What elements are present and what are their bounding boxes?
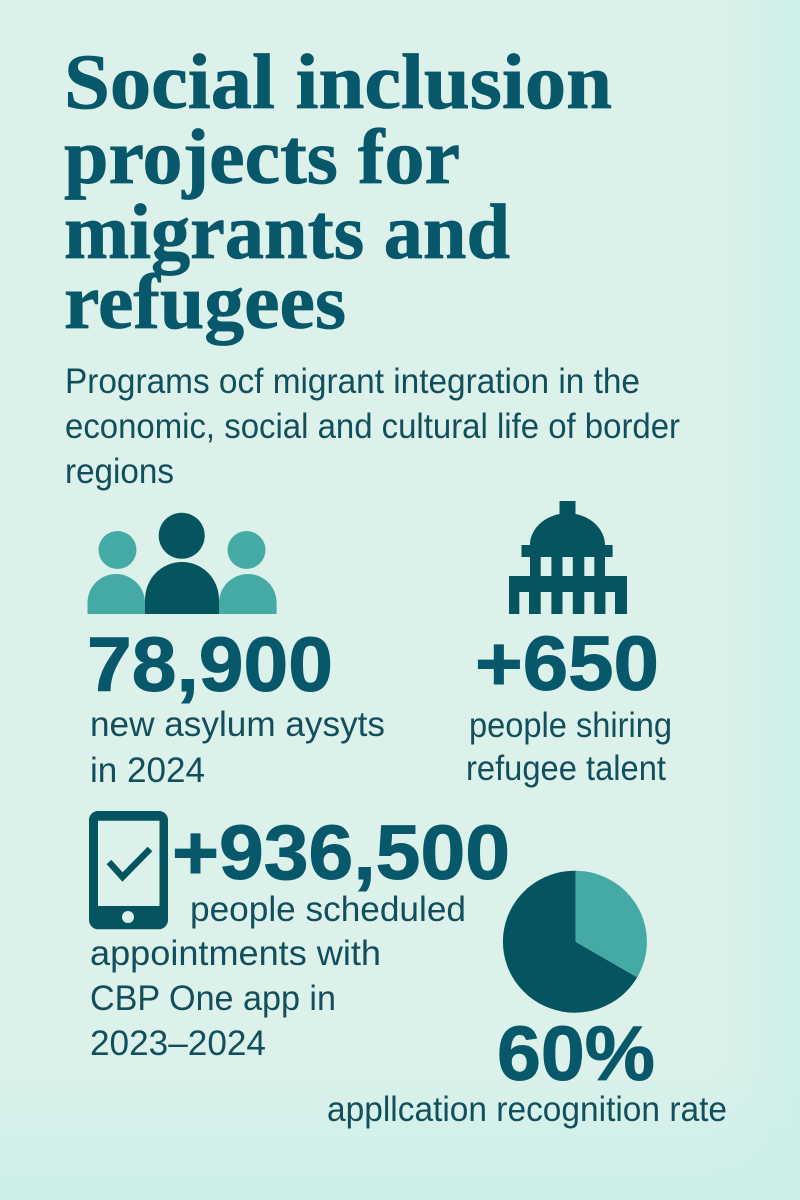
stat: +650: +650 (475, 621, 659, 707)
subtitle: regions (65, 452, 174, 491)
label: people shiring refugee talent (466, 706, 672, 788)
label: people shiring refugee talent: people shiring (469, 706, 672, 745)
stat: +936,500: +936,500 (172, 810, 510, 896)
panel: CBP One appointments (89, 810, 510, 1063)
label: new asylum aysyts in 2024 (90, 705, 385, 790)
subtitle: Programs ocf migrant integration in the (65, 362, 640, 401)
title: Social inclusion (64, 38, 612, 125)
panel: recognition rate (327, 871, 727, 1129)
title: migrants and (64, 188, 510, 275)
label: people scheduled appointments: CBP One app in (90, 979, 336, 1018)
pie chart: 60% (503, 871, 647, 1013)
panel: asylum requests (87, 513, 385, 790)
label: people scheduled appointments: 2023–2024 (90, 1024, 266, 1063)
icon: government building (509, 501, 627, 614)
stat: 60%: 60% (497, 1011, 655, 1097)
label: people shiring refugee talent: refugee talent (466, 749, 666, 788)
label: application recognition rate: appllcation recognition rate (327, 1090, 727, 1129)
label: new asylum aysyts in 2024: new asylum aysyts (90, 705, 385, 744)
subtitle: economic, social and cultural life of border (65, 407, 680, 446)
title (64, 38, 612, 345)
label: new asylum aysyts in 2024: in 2024 (90, 751, 205, 790)
icon: phone with check mark (89, 811, 168, 929)
icon: three people (88, 513, 277, 614)
stat: 78,900: 78,900 (87, 622, 333, 708)
label: people scheduled appointments (90, 890, 466, 1063)
subtitle (65, 362, 680, 491)
label: people scheduled appointments: appointments with (90, 934, 381, 973)
title: projects for (64, 113, 460, 200)
title: refugees (64, 258, 346, 345)
label: people scheduled appointments: people scheduled (190, 890, 466, 929)
panel: refugee talent (466, 501, 672, 788)
